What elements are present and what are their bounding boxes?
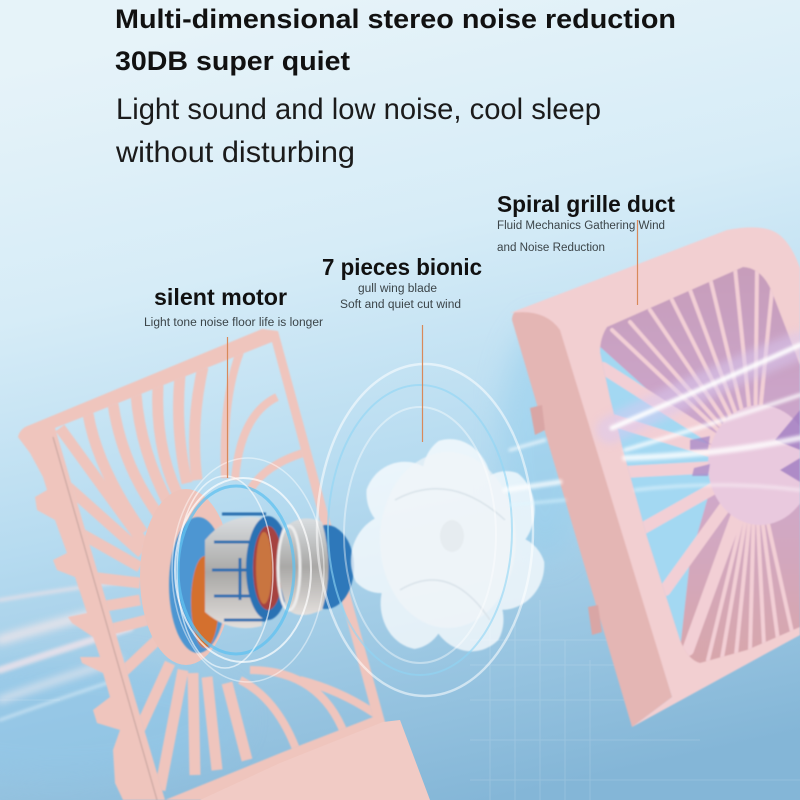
callout: 7 pieces bionic <box>322 254 482 442</box>
sound rings around fan blades <box>317 364 533 696</box>
callout: 7 pieces bionic: Soft and quiet cut wind <box>340 299 461 311</box>
fan blades <box>343 439 552 667</box>
subtitle: without disturbing <box>115 136 355 169</box>
subtitle <box>115 93 601 169</box>
callout: spiral grille duct <box>497 191 675 305</box>
motor <box>169 514 354 653</box>
title: 30DB super quiet <box>115 46 350 76</box>
callout: silent motor: silent motor <box>154 284 287 310</box>
title: Multi-dimensional stereo noise reduction <box>115 4 676 34</box>
subtitle: Light sound and low noise, cool sleep <box>116 93 601 126</box>
callout: spiral grille duct: Spiral grille duct <box>497 191 675 217</box>
sound rings around motor <box>172 458 324 682</box>
callout: spiral grille duct: Fluid Mechanics Gathering Wind <box>497 220 665 232</box>
callout: spiral grille duct: and Noise Reduction <box>497 242 605 254</box>
left grille frame <box>18 329 400 800</box>
callout: 7 pieces bionic: gull wing blade <box>358 283 437 295</box>
callout: 7 pieces bionic: 7 pieces bionic <box>322 254 482 280</box>
hub ring of left grille <box>140 489 232 665</box>
wind streaks: left <box>0 582 130 720</box>
base of the fan <box>200 720 430 800</box>
right grille duct <box>510 227 800 727</box>
callout: silent motor <box>144 284 323 478</box>
callout: silent motor: Light tone noise floor life is longer <box>144 317 323 329</box>
title <box>115 4 676 76</box>
wind streaks: right <box>505 345 800 505</box>
